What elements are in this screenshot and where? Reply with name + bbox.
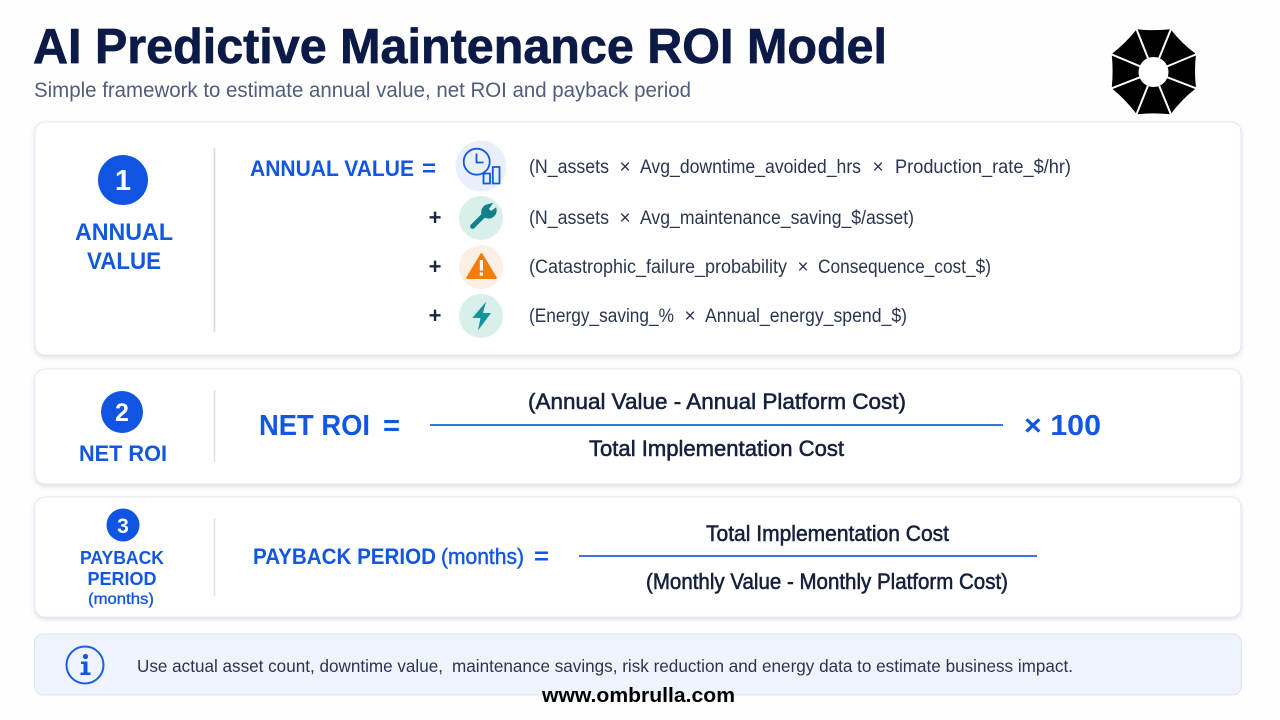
term 3: Consequence_cost_$) <box>818 257 991 278</box>
term 1: × <box>619 157 631 178</box>
title: AI Predictive Maintenance ROI Model <box>33 19 887 74</box>
icon: lightning <box>459 294 503 338</box>
term 1 <box>529 157 1071 178</box>
icon: info <box>66 646 104 684</box>
term 4: × <box>684 306 696 327</box>
term 2 <box>529 208 914 229</box>
formula label: net roi: NET ROI <box>259 410 370 442</box>
panel heading: payback: PAYBACK <box>80 548 164 568</box>
panel heading: months: (months) <box>88 591 154 608</box>
note text: maintenance savings, risk reduction and energy data to estimate business impact. <box>452 656 1073 676</box>
panel: annual value <box>35 122 1241 355</box>
numerator: Total Implementation Cost <box>706 521 949 546</box>
term 1: Avg_downtime_avoided_hrs <box>640 157 861 178</box>
note text: Use actual asset count, downtime value, <box>137 656 443 676</box>
formula label: payback period: = <box>534 543 549 569</box>
panel heading: net roi: NET ROI <box>79 441 167 466</box>
formula label: payback period: PAYBACK PERIOD <box>253 544 436 569</box>
formula label: annual value: ANNUAL VALUE <box>250 156 414 181</box>
step badge 3 <box>106 508 140 542</box>
formula label: payback period <box>253 543 549 569</box>
subtitle: Simple framework to estimate annual value, net ROI and payback period <box>34 79 691 102</box>
icon: clock and chart <box>456 140 506 192</box>
icon: umbrella logo <box>1111 28 1197 116</box>
note text <box>137 656 1073 676</box>
step badge 3: 3 <box>117 515 129 538</box>
term 4: Annual_energy_spend_$) <box>705 306 907 327</box>
term 2: Avg_maintenance_saving_$/asset) <box>640 208 914 229</box>
panel: net roi <box>35 369 1241 484</box>
term 1: Production_rate_$/hr) <box>895 157 1071 178</box>
plus: + <box>429 254 441 279</box>
website footer: www.ombrulla.com <box>541 685 735 707</box>
denominator: (Monthly Value - Monthly Platform Cost) <box>646 569 1008 594</box>
term 1: (N_assets <box>529 157 609 178</box>
term 3: × <box>797 257 809 278</box>
formula label: net roi: = <box>383 410 400 442</box>
callout: note <box>34 634 1242 695</box>
term 2: × <box>619 208 631 229</box>
formula label: payback period: (months) <box>441 544 524 569</box>
denominator: Total Implementation Cost <box>589 436 844 461</box>
term 4: (Energy_saving_% <box>529 306 674 327</box>
term 4 <box>529 306 907 327</box>
step badge 2: 2 <box>115 399 129 427</box>
panel: payback period <box>35 497 1241 617</box>
term 3 <box>529 257 991 278</box>
icon: wrench <box>459 196 503 240</box>
panel heading line 2: VALUE <box>87 248 161 275</box>
multiplier: × 100 <box>1024 410 1101 442</box>
icon: warning <box>459 245 503 289</box>
term 3: (Catastrophic_failure_probability <box>529 257 787 278</box>
panel heading: period: PERIOD <box>88 569 156 589</box>
plus: + <box>429 205 441 230</box>
term 1: × <box>872 157 884 178</box>
step badge 1: 1 <box>115 165 131 197</box>
step badge 2 <box>101 391 143 433</box>
formula label: annual value: = <box>422 155 436 181</box>
term 2: (N_assets <box>529 208 609 229</box>
plus: + <box>429 303 441 328</box>
step badge 1 <box>98 155 148 205</box>
numerator: (Annual Value - Annual Platform Cost) <box>528 389 906 414</box>
panel heading: annual value: ANNUAL <box>75 219 173 246</box>
